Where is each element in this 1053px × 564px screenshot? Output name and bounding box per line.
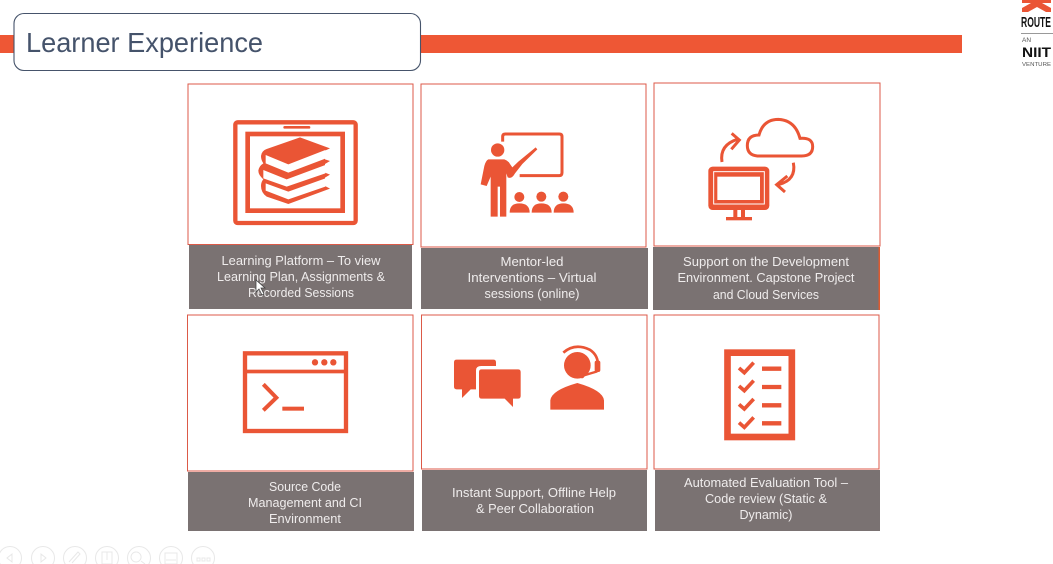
- panel: development environment support: [653, 83, 880, 310]
- panel: automated evaluation tool: [654, 315, 880, 531]
- caption: mentor-led interventions: [468, 255, 596, 301]
- icon: monitor and cloud: [708, 119, 813, 220]
- caption: mentor-led interventions: sessions (online): [484, 287, 580, 301]
- caption: mentor-led interventions: Mentor-led: [500, 255, 564, 269]
- icon: mouse cursor: [256, 280, 265, 295]
- caption: instant support: [452, 486, 616, 516]
- caption: instant support: & Peer Collaboration: [476, 502, 594, 516]
- icon: terminal window: [245, 353, 346, 431]
- caption: automated evaluation tool: Code review (Static &: [705, 492, 828, 506]
- caption: source code management: Environment: [269, 512, 342, 526]
- icon: teacher with students: [481, 134, 574, 217]
- caption: instant support: Instant Support, Offline Help: [452, 486, 616, 500]
- title: Learner Experience: [26, 27, 263, 58]
- caption: automated evaluation tool: Automated Evaluation Tool –: [684, 476, 848, 490]
- panel: learning platform: [188, 84, 413, 309]
- panel: mentor-led interventions: [421, 84, 648, 309]
- caption: development environment support: [678, 255, 855, 302]
- icon: checklist: [727, 353, 792, 437]
- logo: Route by NIIT: VENTURE: [1022, 62, 1051, 68]
- logo: Route by NIIT: AN: [1022, 37, 1031, 44]
- title: [14, 14, 420, 70]
- panel: source code management: [188, 315, 414, 531]
- logo: Route by NIIT: [1021, 0, 1053, 68]
- panel: instant support: [422, 315, 647, 531]
- caption: development environment support: Environment. Capstone Project: [678, 271, 855, 285]
- caption: development environment support: Support on the Development: [683, 255, 850, 269]
- caption: source code management: Source Code: [269, 480, 341, 494]
- icon: chat bubbles and support agent: [454, 347, 604, 410]
- logo: Route by NIIT: NIIT: [1022, 45, 1052, 60]
- caption: source code management: [248, 480, 362, 526]
- caption: learning platform: [217, 254, 386, 300]
- caption: mentor-led interventions: Interventions – Virtual: [468, 271, 596, 285]
- caption: source code management: Management and CI: [248, 496, 362, 510]
- slideshow controls: [0, 546, 214, 564]
- caption: learning platform: Learning Plan, Assignments &: [217, 270, 386, 284]
- caption: automated evaluation tool: [684, 476, 848, 522]
- caption: automated evaluation tool: Dynamic): [740, 508, 792, 522]
- caption: learning platform: Recorded Sessions: [248, 286, 354, 300]
- header bar: [0, 35, 962, 53]
- caption: development environment support: and Cloud Services: [713, 288, 819, 302]
- caption: learning platform: Learning Platform – To view: [222, 254, 381, 268]
- icon: tablet with books: [235, 122, 356, 223]
